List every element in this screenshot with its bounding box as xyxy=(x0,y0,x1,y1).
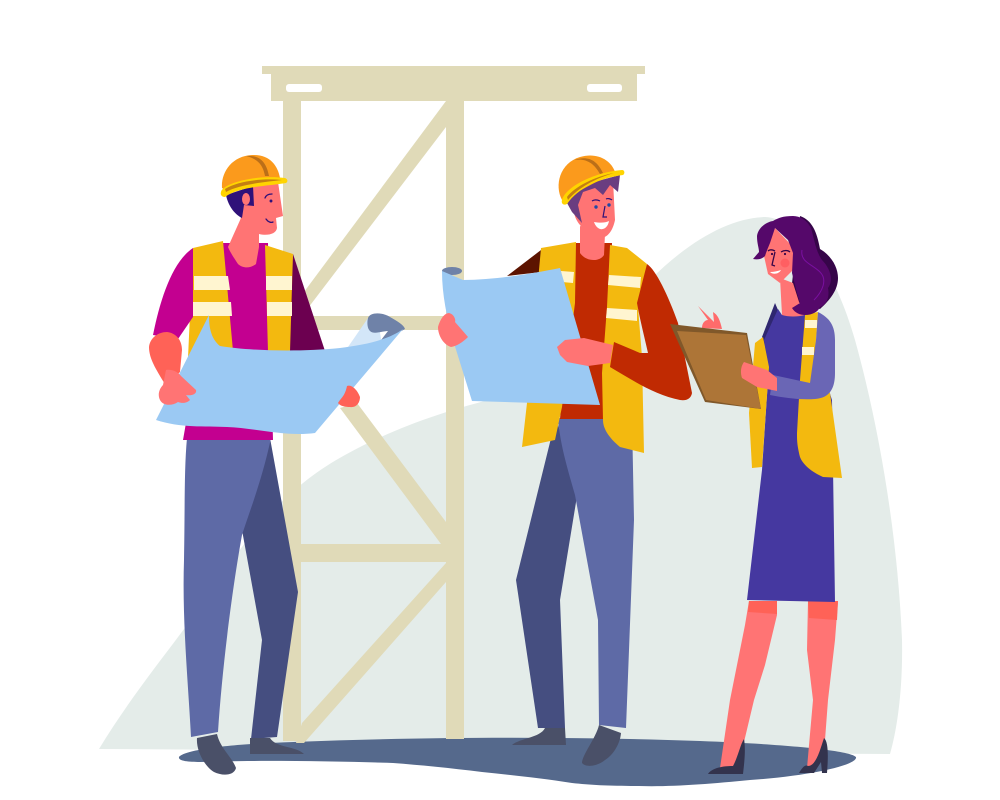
right hand xyxy=(338,386,360,407)
left sleeve xyxy=(153,248,193,339)
face details xyxy=(768,250,790,274)
neck xyxy=(228,218,259,267)
top beam xyxy=(262,66,645,101)
back leg xyxy=(516,418,578,728)
left hand xyxy=(159,370,196,405)
shirt xyxy=(560,243,612,419)
clipboard xyxy=(670,324,761,409)
forearm xyxy=(149,332,182,386)
front leg xyxy=(558,418,634,728)
legs xyxy=(720,601,838,768)
shoes xyxy=(197,734,304,775)
scaffold frame xyxy=(262,66,645,743)
neck xyxy=(580,226,605,260)
face details xyxy=(592,199,612,229)
ear xyxy=(242,193,250,205)
right hand xyxy=(557,338,613,366)
head and face xyxy=(240,182,283,235)
dark strap xyxy=(762,303,778,345)
vest stripes xyxy=(802,320,817,355)
posts xyxy=(283,101,464,741)
vest xyxy=(188,241,293,358)
ground shadow xyxy=(179,738,856,786)
hair highlights xyxy=(802,250,824,300)
worker 2: middle man xyxy=(438,155,692,766)
crossbars xyxy=(301,316,446,562)
hand on clipboard xyxy=(741,362,777,391)
hair xyxy=(753,216,831,315)
front leg xyxy=(184,438,271,737)
blueprint roll xyxy=(442,267,462,275)
hair xyxy=(226,186,254,218)
left hand xyxy=(438,313,468,347)
hair back xyxy=(790,216,838,309)
sleeve xyxy=(770,312,835,399)
head xyxy=(574,180,615,238)
vest xyxy=(522,242,647,453)
worker 1: left man xyxy=(149,155,405,775)
dress xyxy=(747,309,835,602)
arm xyxy=(610,264,692,400)
eye and smile xyxy=(265,194,273,222)
pointing hand xyxy=(698,306,722,329)
worker 3: woman with clipboard xyxy=(670,216,842,774)
right arm dark xyxy=(285,254,325,355)
blueprint roll xyxy=(348,313,405,347)
shirt xyxy=(183,243,273,440)
knee shadows xyxy=(748,601,838,620)
back leg xyxy=(242,438,298,739)
face xyxy=(764,228,793,283)
shoes xyxy=(512,725,621,766)
hard hat xyxy=(559,155,624,205)
diagonal braces xyxy=(296,101,446,743)
blueprint sheet xyxy=(442,268,600,405)
background hill xyxy=(99,217,902,754)
vest stripes xyxy=(193,276,292,316)
hard hat xyxy=(221,155,287,197)
vest xyxy=(749,312,842,478)
heels xyxy=(708,738,828,774)
neck xyxy=(780,278,805,316)
blush xyxy=(780,258,790,268)
blueprint sheet xyxy=(156,315,403,434)
hair xyxy=(567,175,620,223)
vest stripes xyxy=(561,271,641,321)
left shoulder dark xyxy=(507,250,541,276)
